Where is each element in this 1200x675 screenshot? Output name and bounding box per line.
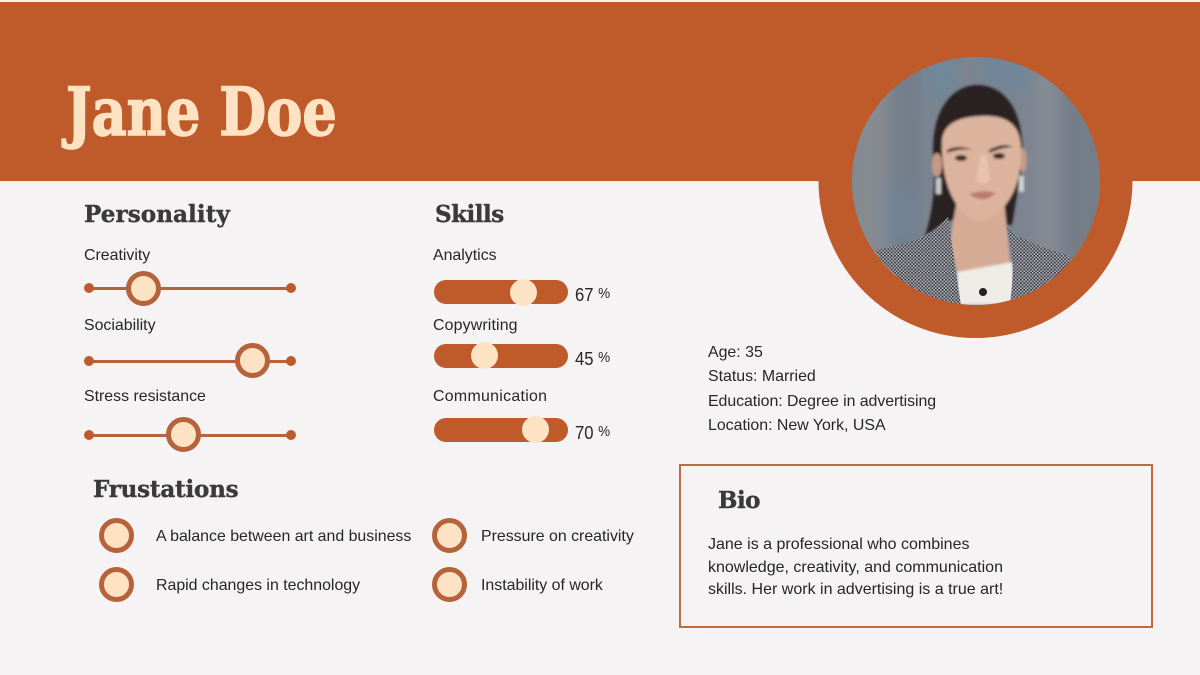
skill bar: communication [433, 388, 610, 443]
header band [0, 2, 1200, 181]
personality slider: creativity [84, 247, 296, 306]
frustration: creativity: Pressure on creativity [481, 528, 634, 545]
skill bar: communication: Communication [433, 388, 547, 405]
bio text: skills. Her work in advertising is a true art! [708, 581, 1003, 598]
frustration: technology: Rapid changes in technology [156, 577, 360, 594]
personality slider: stress resistance [84, 388, 296, 452]
skill bar: copywriting [433, 317, 610, 369]
personality heading: Personality [84, 201, 230, 228]
skill bar: communication: 70 % [575, 422, 610, 443]
bio text [708, 536, 1003, 598]
skills heading: Skills [435, 201, 504, 228]
bio panel [679, 464, 1153, 628]
demographic details: Education: Degree in advertising [708, 393, 936, 410]
skill bar: analytics [433, 247, 610, 306]
skill bar: copywriting: 45 % [575, 348, 610, 369]
demographic details: Location: New York, USA [708, 417, 886, 434]
frustration: instability [432, 567, 603, 602]
bio heading: Bio [718, 487, 760, 514]
frustration: creativity [432, 518, 634, 553]
demographic details: Status: Married [708, 368, 816, 385]
personality slider: sociability: Sociability [84, 317, 156, 334]
frustrations heading: Frustations [93, 476, 238, 503]
bio text: knowledge, creativity, and communication [708, 558, 1003, 576]
frustration: balance: A balance between art and business [156, 528, 411, 545]
frustration: instability: Instability of work [481, 577, 603, 594]
skill bar: analytics: 67 % [575, 284, 610, 305]
title: Jane Doe [66, 73, 337, 151]
personality slider: creativity: Creativity [84, 247, 150, 264]
demographic details [708, 344, 936, 434]
demographic details: Age: 35 [708, 344, 763, 361]
frustration: technology [99, 567, 360, 602]
skill bar: copywriting: Copywriting [433, 317, 518, 334]
frustration: balance [99, 518, 411, 553]
portrait photo in circle [818, 57, 1132, 338]
personality slider: sociability [84, 317, 296, 378]
personality slider: stress resistance: Stress resistance [84, 388, 206, 405]
bio text: Jane is a professional who combines [708, 536, 969, 553]
skill bar: analytics: Analytics [433, 247, 497, 264]
